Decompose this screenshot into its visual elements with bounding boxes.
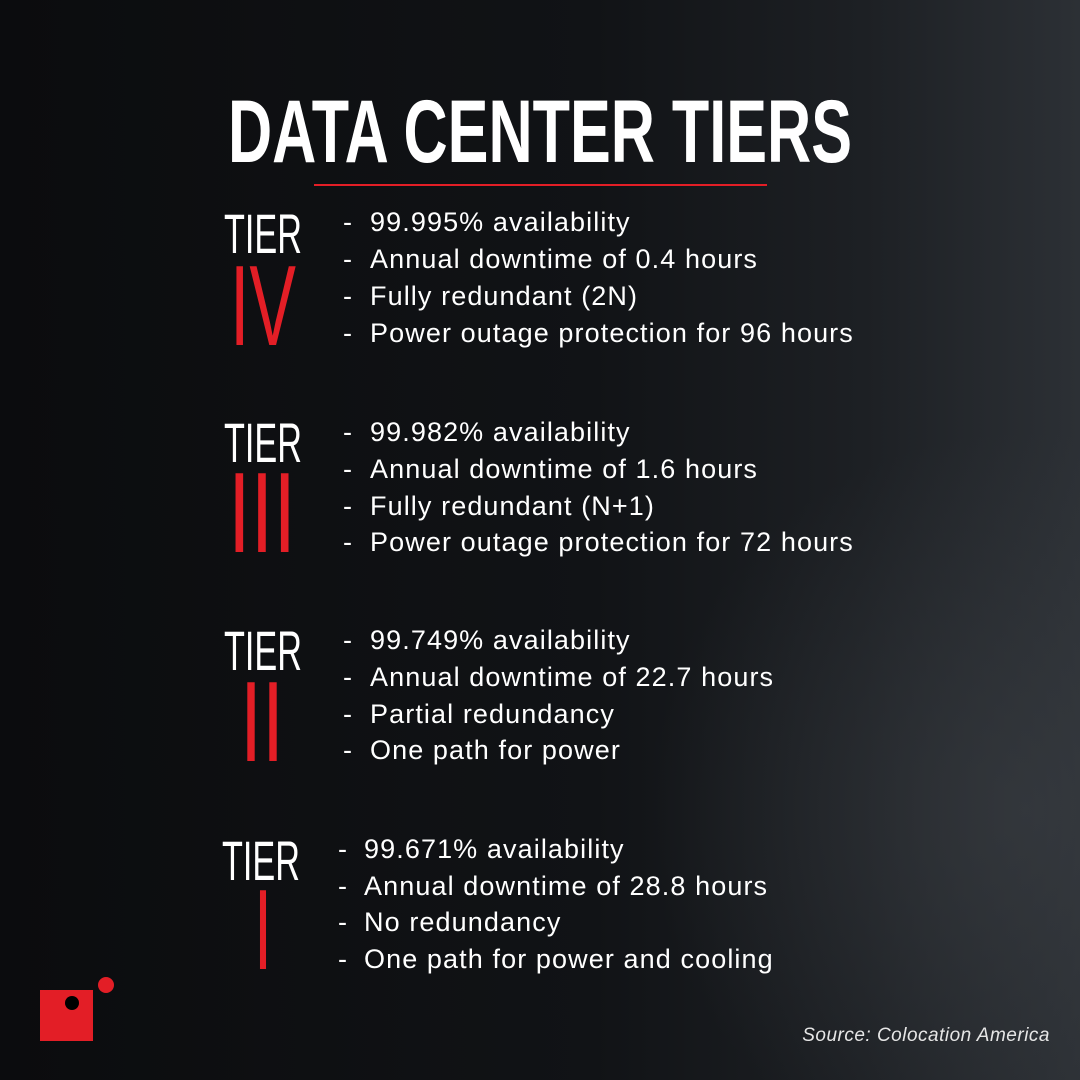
icon: logo [40, 977, 114, 1041]
list: tier II: - [343, 699, 353, 729]
list: tier II: One path for power [370, 735, 621, 765]
label: tier II: II [240, 659, 284, 786]
source note: Source: Colocation America [802, 1025, 1050, 1046]
list: tier I: No redundancy [364, 907, 561, 937]
tier III [224, 411, 854, 577]
list: tier II: - [343, 625, 353, 655]
label: tier IV: TIER [224, 202, 302, 265]
label: tier IV [224, 202, 302, 370]
list: tier III: Fully redundant (N+1) [370, 491, 655, 521]
list: tier III [343, 417, 854, 557]
list: tier III: Power outage protection for 72 hours [370, 527, 854, 557]
list: tier I: - [338, 907, 348, 937]
list: tier II: Annual downtime of 22.7 hours [370, 662, 774, 692]
list: tier II [343, 625, 774, 765]
list: tier III: 99.982% availability [370, 417, 631, 447]
list: tier II: - [343, 735, 353, 765]
list: tier IV: Fully redundant (2N) [370, 281, 638, 311]
label: tier II [224, 619, 302, 786]
label: tier I: I [254, 867, 272, 994]
list: tier IV: Power outage protection for 96 hours [370, 318, 854, 348]
list: tier IV: - [343, 281, 353, 311]
list: tier III: Annual downtime of 1.6 hours [370, 454, 758, 484]
list: tier IV: Annual downtime of 0.4 hours [370, 244, 758, 274]
label: tier II: TIER [224, 619, 302, 682]
list: tier I: - [338, 871, 348, 901]
list: tier IV: - [343, 244, 353, 274]
label: tier IV: IV [230, 243, 296, 370]
label: tier III: TIER [224, 411, 302, 474]
label: tier I: TIER [222, 829, 300, 892]
list: tier III: - [343, 527, 353, 557]
list: tier I: - [338, 834, 348, 864]
list: tier III: - [343, 491, 353, 521]
list: tier III: - [343, 454, 353, 484]
list: tier I: 99.671% availability [364, 834, 625, 864]
list: tier IV: 99.995% availability [370, 207, 631, 237]
list: tier IV [343, 207, 854, 348]
list: tier I: One path for power and cooling [364, 944, 774, 974]
label: tier III: III [228, 450, 296, 577]
list: tier II: 99.749% availability [370, 625, 631, 655]
tier IV [224, 202, 854, 370]
tier II [224, 619, 774, 786]
label: tier III [224, 411, 302, 577]
list: tier III: - [343, 417, 353, 447]
list: tier IV: - [343, 207, 353, 237]
list: tier I: - [338, 944, 348, 974]
list: tier I: Annual downtime of 28.8 hours [364, 871, 768, 901]
label: tier I [222, 829, 300, 994]
list: tier IV: - [343, 318, 353, 348]
list: tier II: Partial redundancy [370, 699, 615, 729]
list: tier I [338, 834, 774, 974]
tier I [222, 829, 774, 994]
list: tier II: - [343, 662, 353, 692]
